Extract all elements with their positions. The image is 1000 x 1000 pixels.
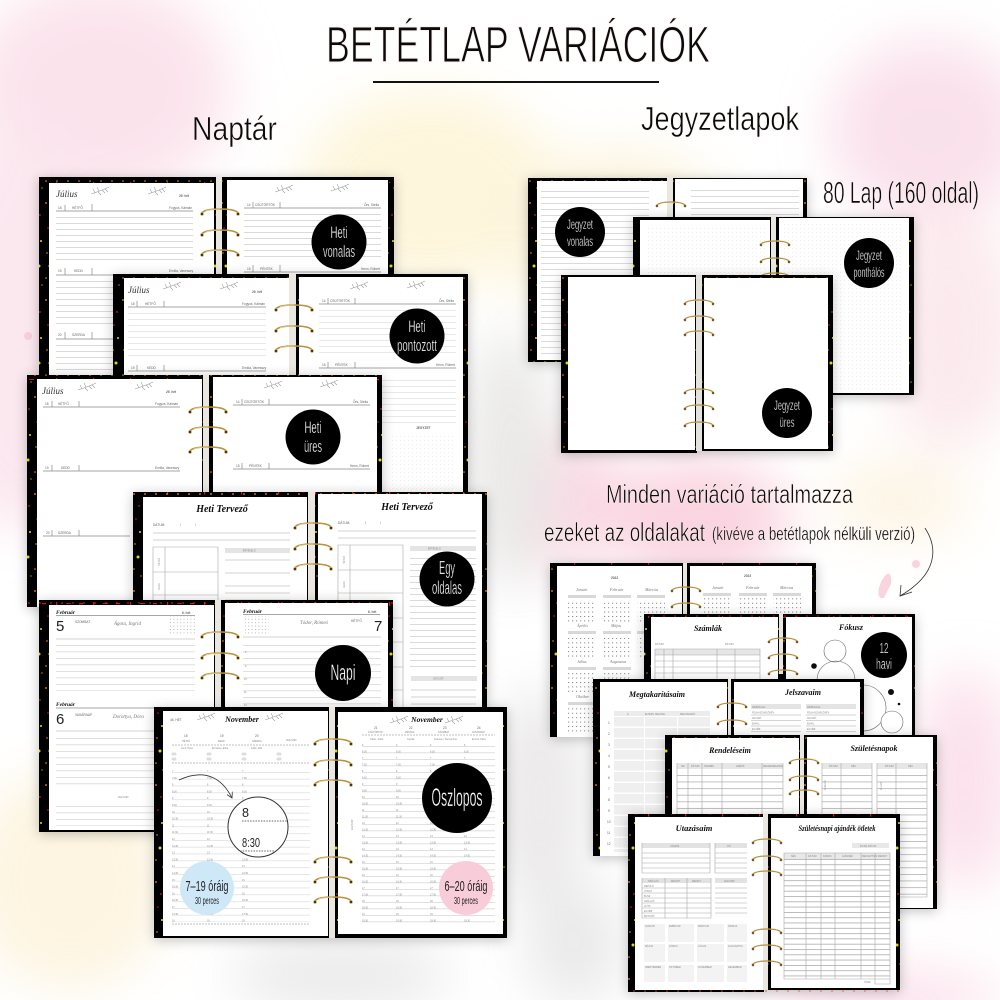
badge: Jegyzet ponthálós: ponthálós xyxy=(854,264,884,280)
spread: Számlák és Fókusz xyxy=(644,614,915,739)
page: Utazásaim: MÁRCIUS xyxy=(698,925,709,928)
badge: Napi: Napi xyxy=(330,660,356,685)
badge: Jegyzet ponthálós xyxy=(844,238,894,288)
spread: Heti pontozott: 29. hét xyxy=(252,290,263,294)
badge: Heti vonalas: vonalas xyxy=(323,242,355,261)
spread: Napi: 6. hét xyxy=(368,610,377,614)
spread: Heti vonalas: 20 xyxy=(58,333,62,337)
spread: Egy oldalas: JEGYZET xyxy=(433,678,444,680)
spread: Heti vonalas xyxy=(39,177,394,377)
spread: Heti pontozott: KEDD xyxy=(147,366,157,370)
pink splashes xyxy=(24,332,920,598)
page: Születésnapok: NÉV xyxy=(851,765,856,768)
page: Utazásaim: REPÜLŐ xyxy=(644,885,654,888)
page: Utazásaim: JEGYZET xyxy=(724,880,735,883)
spread: Heti pontozott: JEGYZET xyxy=(416,426,431,430)
page: Megtakarításaim: ELTERV. MEGTAK. xyxy=(645,713,666,716)
badge: 7-19 óráig: 30 perces xyxy=(195,896,219,907)
badge: 6-20 óráig: 6–20 óráig xyxy=(444,878,488,895)
spread: Napi: 8 xyxy=(245,651,247,654)
calendar 2022: Február xyxy=(609,587,624,592)
page: Jelszavaim: FELHASZNÁLÓNÉV: xyxy=(752,712,775,714)
spread: Heti vonalas: CSÜTÖRTÖK xyxy=(255,203,276,207)
magnifier: 8 and 8:30 xyxy=(228,797,288,857)
left page: Három nap: Jenő, Péter xyxy=(181,747,193,750)
calendar 2023: Március xyxy=(779,585,794,590)
spread: Megtakarításaim és Jelszavaim xyxy=(593,679,864,856)
spread: Heti vonalas: PÉNTEK xyxy=(260,266,274,271)
spread: Egy oldalas: ÉRTÉKELŐ xyxy=(243,550,256,552)
spread: Napi: HÉTFŐ xyxy=(351,618,362,623)
spread: Heti vonalas: HÉTFŐ xyxy=(72,205,83,210)
badge: Jegyzet ponthálós: Jegyzet xyxy=(856,247,882,263)
badge: Oszlopos: Oszlopos xyxy=(432,784,482,812)
page: Utazásaim xyxy=(642,823,747,982)
spread: Egy oldalas: KEDD xyxy=(343,581,346,588)
page: Utazásaim: MENNYI xyxy=(692,880,702,883)
calendar 2022: Október xyxy=(576,694,590,699)
badge: Heti üres: üres xyxy=(304,437,322,456)
spread: Napi: Február xyxy=(243,609,263,615)
page: Rendeléseim: Rendeléseim xyxy=(708,746,751,755)
left page: Három nap: November xyxy=(224,715,260,724)
spread: Heti pontozott: 19 xyxy=(131,366,135,370)
spread: Heti pontozott: Július xyxy=(128,285,150,295)
spread: Heti vonalas: 19 xyxy=(58,269,62,273)
spread: Heti üres: Július xyxy=(42,386,64,396)
spread: Egy oldalas: / xyxy=(365,521,366,525)
page: Megtakarításaim: 2 xyxy=(608,732,610,736)
calendar 2023: 2023 xyxy=(744,574,751,578)
spread: Egy oldalas: Heti Tervező xyxy=(380,502,434,513)
right page: Négy nap: November xyxy=(410,715,443,724)
page: Rendeléseim xyxy=(677,746,783,815)
spread: Heti vonalas: 29. hét xyxy=(179,194,190,198)
spread: Napi: 5 xyxy=(56,618,64,635)
page: Születésnapi ajándék ötletek: MENNYI xyxy=(878,855,888,858)
spread: Heti vonalas: KEDD xyxy=(74,269,84,273)
page: Utazásaim: VONAT xyxy=(644,890,653,893)
page: Rendeléseim: TERMÉK xyxy=(704,765,714,768)
calendar 2022: Január xyxy=(576,587,588,592)
page: Jelszavaim: JELSZÓ: xyxy=(752,717,762,720)
spread: Egy oldalas: HÉTFŐ xyxy=(343,556,346,564)
right page: Négy nap: 21 xyxy=(374,726,378,730)
spread: Jegyzet üres xyxy=(561,275,833,453)
spread: Egy oldalas: DÁTUM: xyxy=(338,521,350,525)
page: Jelszavaim: WEBOLDAL: xyxy=(752,706,766,709)
page: Megtakarításaim: 5 xyxy=(608,765,610,769)
page: Születésnapi ajándék ötletek xyxy=(784,824,890,984)
badge: Oszlopos xyxy=(422,763,492,833)
spread: Egy oldalas: HÉTFŐ xyxy=(158,558,161,566)
text: Minden variáció tartalmazza: Minden variáció tartalmazza xyxy=(606,479,853,509)
spread: Heti üres: 19 xyxy=(45,466,49,470)
badge: Jegyzet üres: Jegyzet xyxy=(774,397,800,413)
page: Rendeléseim: LEÍRÁS xyxy=(736,765,745,768)
spread: Egy oldalas: ÉRTÉKELŐ xyxy=(428,548,441,550)
spread: Heti pontozott xyxy=(113,274,468,604)
spread: Napi: 10 xyxy=(244,678,247,681)
page: Utazásaim: OKTÓBER xyxy=(669,966,681,969)
right page: Négy nap: CSÜTÖRTÖK xyxy=(368,731,383,734)
spread: Egy oldalas: DÁTUM: xyxy=(153,523,165,527)
spread: Egy oldalas xyxy=(133,492,487,708)
left page: Három nap: JEGYZET xyxy=(286,739,297,742)
page: Rendeléseim: NR. xyxy=(681,765,685,768)
page: Megtakarításaim xyxy=(607,690,710,852)
spread: Heti üres: 15 xyxy=(236,464,240,468)
spread: Napi xyxy=(39,600,393,832)
page: Születésnapi ajándék ötletek: KOROK xyxy=(823,855,832,858)
spread: Heti vonalas: 18 xyxy=(58,206,62,210)
page: Jelszavaim: Jelszavaim xyxy=(784,688,821,697)
badge: Jegyzet üres: üres xyxy=(780,414,794,430)
spread: Heti üres: 29. hét xyxy=(166,390,177,394)
spread: Heti pontozott: 18 xyxy=(131,302,135,306)
left page: Három nap: Jolán, Edit xyxy=(251,747,262,750)
spread: Heti pontozott: Henn, Róbert xyxy=(436,363,455,367)
page: Utazásaim: AUTÓ xyxy=(644,905,651,908)
badge: 6-20 óráig: 30 perces xyxy=(454,896,478,907)
page: Utazásaim: MIKOR? xyxy=(671,880,681,883)
page: Utazásaim: NOVEMBER xyxy=(698,966,712,969)
spread: Heti üres: Őrs, Stella xyxy=(353,399,368,404)
page: Utazásaim: FEBRUÁR xyxy=(669,925,681,928)
page: Jelszavaim: EMAIL: xyxy=(752,722,760,726)
badge: Jegyzet vonalas xyxy=(555,207,605,257)
spread: Napi: VASÁRNAP xyxy=(75,713,92,717)
page: Utazásaim: EGYÉB xyxy=(644,910,653,913)
page: Utazásaim: MÁJUS xyxy=(645,945,654,948)
calendar 2023: Január xyxy=(712,585,724,590)
page: Utazásaim: JANUÁR xyxy=(645,925,655,928)
calendar 2022 xyxy=(568,576,665,733)
page: Megtakarításaim: 4 xyxy=(608,754,610,758)
right page: Négy nap: Cecília xyxy=(407,738,415,741)
text: kivéve a betétlapok nélküli verzió: (kivéve a betétlapok nélküli verzió) xyxy=(712,524,915,544)
page: Számlák xyxy=(655,624,760,680)
page: Megtakarításaim: 10 xyxy=(607,820,611,824)
page: Születésnapok xyxy=(822,744,927,897)
page: Utazásaim: AUGUSZTUS xyxy=(728,945,743,948)
page: Megtakarításaim: 1 xyxy=(608,721,610,725)
page: Utazásaim: BIZTOSÍT. xyxy=(644,915,655,918)
badge: Jegyzet vonalas: vonalas xyxy=(567,233,593,249)
spread: Jegyzet ponthálós xyxy=(633,215,914,395)
arrow: curved pointer xyxy=(900,528,933,596)
page: Megtakarításaim: 9 xyxy=(608,809,610,813)
spread: Napi: Tódor, Rómeó xyxy=(300,621,329,626)
spread: Heti üres: KEDD xyxy=(61,466,71,470)
badge: Heti üres xyxy=(286,410,340,464)
page: Fókusz: Fókusz xyxy=(838,623,864,632)
spread: Napi: Ágota, Ingrid xyxy=(113,621,141,627)
page: Születésnapok: NÉV xyxy=(908,765,913,768)
spread: Napi: 6. hét xyxy=(182,611,191,615)
page: Megtakarításaim: 8 xyxy=(608,798,610,802)
calendar 2022: Március xyxy=(644,587,659,592)
right page: Négy nap: Emma, Flóra xyxy=(472,738,486,741)
spread: Heti pontozott: Őrs, Stella xyxy=(439,298,454,303)
heading: Jegyzetlapok: Jegyzetlapok xyxy=(641,100,799,137)
right page: Négy nap: PÉNTEK xyxy=(405,731,415,734)
spread: Napi: SZOMBAT xyxy=(75,620,90,624)
spread: Heti vonalas: 14 xyxy=(247,203,251,207)
page: Utazásaim: JÚNIUS xyxy=(669,945,678,948)
page: Születésnapi ajándék ötletek: ÖSSZ. xyxy=(864,981,872,984)
page: Megtakarításaim: Á xyxy=(627,713,629,716)
left page: Három nap: 46. HÉT xyxy=(170,717,182,722)
spread: Éves naptár xyxy=(550,563,816,737)
spread: Heti pontozott: 15 xyxy=(322,363,326,367)
page: Megtakarításaim: MEGTAKARÍT. xyxy=(680,713,696,716)
calendar 2022: Április xyxy=(576,623,588,628)
badge: Egy oldalas xyxy=(420,552,474,606)
page: Utazásaim: DECEMBER xyxy=(728,966,742,969)
page: Születésnapi ajándék ötletek: AJÁNDÉK xyxy=(842,855,853,858)
left page: Három nap: SZERDA xyxy=(252,740,262,743)
left page: Három nap: 18 xyxy=(184,734,188,738)
spread: Heti üres: 20 xyxy=(46,531,50,535)
page: Utazásaim: SZÁLLÁS xyxy=(644,900,655,903)
page: Jelszavaim: EMAIL: xyxy=(807,722,815,726)
right page: Négy nap: 23 xyxy=(443,726,447,730)
spread: Heti vonalas: Henn, Róbert xyxy=(361,267,380,271)
spread: Heti üres: CSÜTÖRTÖK xyxy=(244,400,265,404)
spread: Oszlopos xyxy=(154,707,507,938)
page: Jelszavaim xyxy=(751,688,856,732)
badge: Jegyzet vonalas: Jegyzet xyxy=(567,216,593,232)
right page: Négy nap: VASÁRNAP xyxy=(472,731,485,734)
right page: Négy nap: 24 xyxy=(477,726,481,730)
badge: Heti pontozott: pontozott xyxy=(397,336,437,355)
badge: Egy oldalas: oldalas xyxy=(432,578,462,598)
spread: Napi: 9 xyxy=(245,665,247,668)
page: Születésnapok: JANUÁR xyxy=(824,780,827,790)
page: Születésnapi ajándék ötletek: MEGVETTEM xyxy=(862,855,877,858)
spread: Napi: 12 xyxy=(244,704,247,707)
calendar 2022: 2022 xyxy=(611,576,618,580)
spread: Heti vonalas: 15 xyxy=(247,267,251,271)
page: Jelszavaim: JELSZÓ: xyxy=(807,717,817,720)
arrow to magnified detail xyxy=(179,775,232,798)
spread: Egy oldalas: KEDD xyxy=(158,583,161,590)
page: Számlák: DÁTUM: xyxy=(725,643,734,646)
page: Születésnapok: DÁTUM xyxy=(885,765,894,768)
spread: Jegyzet vonalas xyxy=(528,176,807,362)
page: Születésnapok: DÁTUM xyxy=(829,765,838,768)
left page: Három nap: Erzsébet, Erika xyxy=(212,747,229,750)
badge: Napi xyxy=(315,645,371,701)
magnifier: 8 and 8:30: 8:30 xyxy=(242,835,260,850)
page: Jelszavaim: FELHASZNÁLÓNÉV: xyxy=(807,712,830,714)
badge: Heti vonalas xyxy=(312,214,366,270)
page: Jelszavaim: WEBOLDAL: xyxy=(807,706,821,709)
heading: Naptár: Naptár xyxy=(192,110,277,147)
page: Utazásaim: SZÁLLÁS xyxy=(648,880,659,883)
badge: 12 havi: 12 xyxy=(880,640,888,657)
spread: Heti vonalas: Július xyxy=(56,189,78,199)
page: Születésnapok: JÚLIUS xyxy=(880,781,883,790)
spread: Heti vonalas: Emília, Vanesszy xyxy=(169,269,194,273)
badge: 7-19 óráig: 7–19 óráig xyxy=(186,878,228,895)
page: Jelszavaim: EGYÉB: xyxy=(807,728,816,731)
spread: Heti pontozott: 14 xyxy=(322,299,326,303)
page: Utazásaim: UTAZÁS xyxy=(670,845,680,848)
badge: Egy oldalas: Egy xyxy=(439,558,455,578)
page: Utazásaim: ÚTI xyxy=(727,845,731,848)
right page: Négy nap xyxy=(351,715,495,926)
spread: Heti üres: PÉNTEK xyxy=(249,463,263,468)
spread: Egy oldalas: Heti Tervező xyxy=(195,504,249,515)
spread: Napi: 11 xyxy=(244,691,247,694)
spread: Napi: Dorottya, Dóra xyxy=(112,715,144,720)
badge: Heti pontozott: Heti xyxy=(408,317,426,336)
left page: Három nap: KEDD xyxy=(218,740,225,743)
spread: Heti üres: SZERDA xyxy=(58,531,72,535)
left page: Három nap: HÉTFŐ xyxy=(182,740,190,743)
page: Számlák: DÁTUM: xyxy=(655,643,664,646)
right page: Négy nap: Olivér, Jolán xyxy=(370,738,384,741)
spread: Heti pontozott: Fogyos, Kálmán xyxy=(242,302,265,306)
page: Születésnapi ajándék ötletek: ÉV/KÉ DÁTUM xyxy=(860,845,876,848)
spread: Heti üres: 18 xyxy=(45,402,49,406)
spread: Napi: 6 xyxy=(56,711,64,728)
spread: Heti vonalas: Őrs, Stella xyxy=(364,202,379,207)
spread: Egy oldalas: / xyxy=(180,523,181,527)
page: Rendeléseim: DÁTUM xyxy=(691,765,700,768)
calendar 2022: Augusztus xyxy=(609,659,627,664)
title underline xyxy=(373,81,659,83)
calendar 2023 xyxy=(703,574,801,616)
page: Megtakarításaim: 6 xyxy=(608,776,610,780)
magnifier: 8 and 8:30: 8 xyxy=(242,805,249,820)
badge: 12 havi xyxy=(861,632,907,678)
badge: Heti vonalas: Heti xyxy=(330,223,348,242)
badge: 6-20 óráig xyxy=(439,861,493,915)
calendar 2022: Május xyxy=(610,623,621,628)
spread: Heti üres: Fogyos, Kálmán xyxy=(155,402,178,406)
spread: Heti pontozott: HÉTFŐ xyxy=(145,301,156,306)
page: Megtakarításaim: 7 xyxy=(608,787,610,791)
right page: Négy nap: JEGYZET xyxy=(351,819,354,830)
page: Utazásaim: BUSZ xyxy=(644,895,651,898)
right page: Négy nap: 22 xyxy=(409,726,413,730)
spread: Heti üres xyxy=(27,375,382,607)
calendar 2023: Február xyxy=(745,585,760,590)
spread: Egy oldalas: / xyxy=(195,523,196,527)
left page: Három nap: 20 xyxy=(255,734,259,738)
spread: Heti vonalas: Fogyos, Kálmán xyxy=(169,206,192,210)
title: BETÉTLAP VARIÁCIÓK xyxy=(326,16,710,73)
page: Megtakarításaim: 3 xyxy=(608,743,610,747)
page: Rendeléseim: MEGRENDELTEM xyxy=(763,765,783,768)
calendar 2022: Július xyxy=(577,659,587,664)
badge: Heti üres: Heti xyxy=(304,418,322,437)
page: Utazásaim: Utazásaim xyxy=(676,823,713,833)
calendar 2022: Június xyxy=(645,623,656,628)
badge: 12 havi: havi xyxy=(876,656,892,673)
page: Számlák: Számlák xyxy=(694,624,722,633)
page: Születésnapi ajándék ötletek: NÉV xyxy=(791,855,796,858)
page: Születésnapi ajándék ötletek: Születésnapi ajándék ötletek xyxy=(798,824,876,833)
spread: Rendeléseim és Születésnapok xyxy=(665,735,937,909)
badge: 7-19 óráig xyxy=(180,861,234,915)
page: Megtakarításaim: 12 xyxy=(607,842,611,846)
page: Fókusz xyxy=(811,623,903,733)
spread: Egy oldalas: / xyxy=(380,521,381,525)
spread: Utazásaim és Ajándék ötletek xyxy=(628,814,900,992)
page: Születésnapok: Születésnapok xyxy=(850,744,898,753)
page: Megtakarításaim: Megtakarításaim xyxy=(628,690,685,699)
badge: Jegyzet üres xyxy=(762,388,812,438)
page: Utazásaim: JÚLIUS xyxy=(698,945,707,948)
spread: Heti vonalas: SZERDA xyxy=(72,333,86,337)
spread: Heti üres: Emília, Vanesszy xyxy=(155,466,180,470)
text: ezeket az oldalakat: ezeket az oldalakat xyxy=(544,517,706,547)
page: Jelszavaim: EGYÉB: xyxy=(752,728,761,731)
spread: Napi: JEGYZET xyxy=(118,796,129,799)
spread: Heti pontozott: PÉNTEK xyxy=(335,362,349,367)
page: Megtakarításaim: 11 xyxy=(607,831,611,835)
page: Utazásaim: ÁPRILIS xyxy=(728,925,738,928)
badge: Heti pontozott xyxy=(390,308,444,364)
page: Születésnapi ajándék ötletek: DÁTUM xyxy=(808,855,817,858)
spread: Heti üres: 14 xyxy=(236,400,240,404)
spread: Napi: Február xyxy=(56,702,76,708)
spread: Heti pontozott: Emília, Vanesszy xyxy=(242,366,267,370)
left page: Három nap xyxy=(170,713,310,924)
right page: Négy nap: Kelemen, Klementina xyxy=(434,738,457,741)
spread: Heti üres: HÉTFŐ xyxy=(58,401,69,406)
page: Utazásaim: SZEPTEMBER xyxy=(645,966,661,969)
left page: Három nap: 19 xyxy=(220,734,224,738)
spread: Heti pontozott: CSÜTÖRTÖK xyxy=(330,299,351,303)
spread: Napi: 7 xyxy=(374,618,382,635)
spread: Napi: Február xyxy=(56,610,76,616)
spread: Heti üres: Henn, Róbert xyxy=(350,464,369,468)
right page: Négy nap: SZOMBAT xyxy=(438,731,450,734)
